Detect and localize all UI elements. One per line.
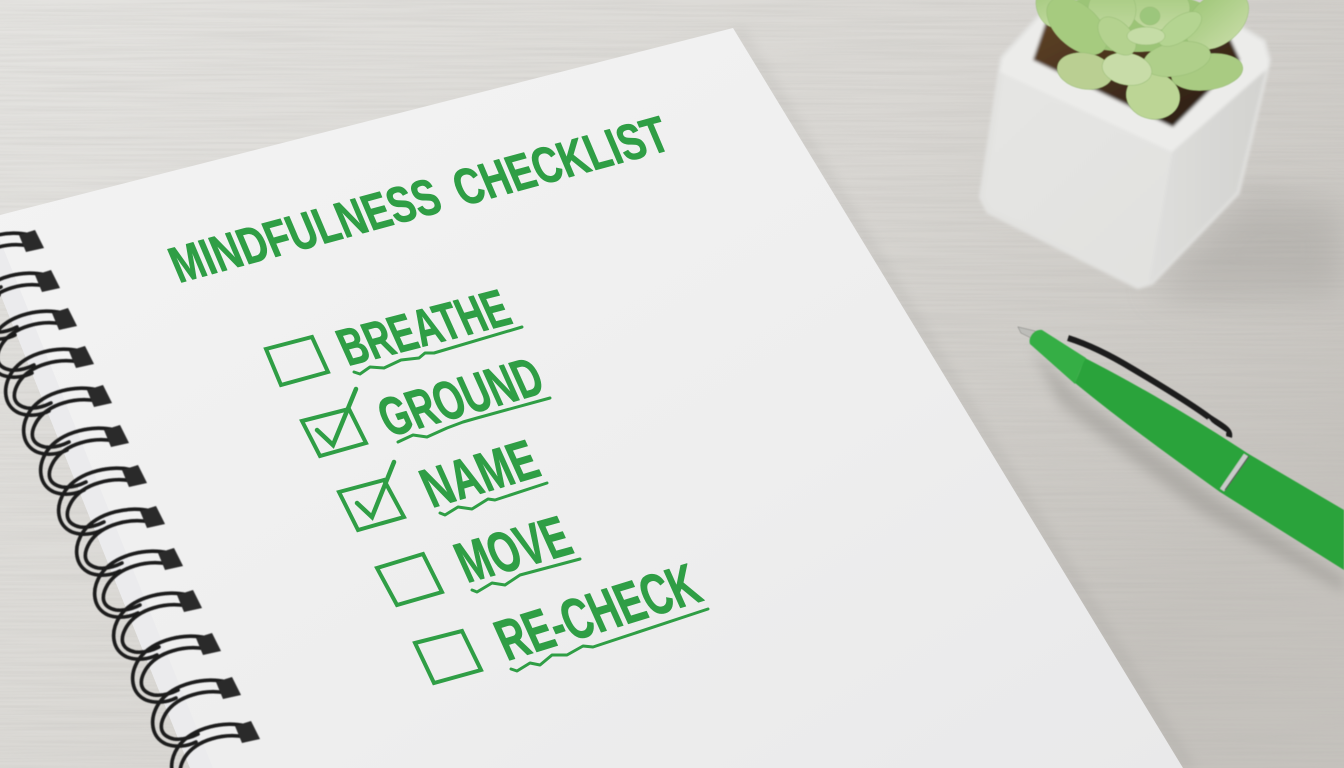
- spiral binding: [0, 230, 260, 768]
- succulent in white pot: [982, 0, 1268, 286]
- pen ring: [1222, 455, 1246, 490]
- pot: [982, 17, 1268, 286]
- pen tip: [1018, 327, 1035, 339]
- notebook shadow: [733, 28, 1195, 768]
- item: name: NAME: [411, 429, 549, 520]
- item: move: [377, 505, 581, 605]
- item: re-check: [415, 553, 711, 683]
- succulent leaves: [1031, 0, 1260, 124]
- item: name: [339, 429, 549, 530]
- pen nose: [1030, 330, 1086, 384]
- item: re-check: RE-CHECK: [486, 553, 711, 673]
- spine strip: [0, 240, 213, 768]
- item: ground: GROUND: [368, 345, 553, 448]
- title: MINDFULNESS CHECKLIST: [161, 106, 678, 294]
- checklist: [266, 279, 711, 683]
- item: ground: [302, 345, 553, 456]
- pen body: [1075, 358, 1344, 570]
- item: breathe: BREATHE: [328, 279, 519, 377]
- pen shadow: [1030, 345, 1344, 592]
- item: breathe: [266, 279, 522, 385]
- green pen: [1018, 327, 1344, 570]
- item: move: MOVE: [446, 505, 581, 595]
- pot shadow: [1150, 190, 1344, 300]
- pen clip: [1068, 338, 1229, 437]
